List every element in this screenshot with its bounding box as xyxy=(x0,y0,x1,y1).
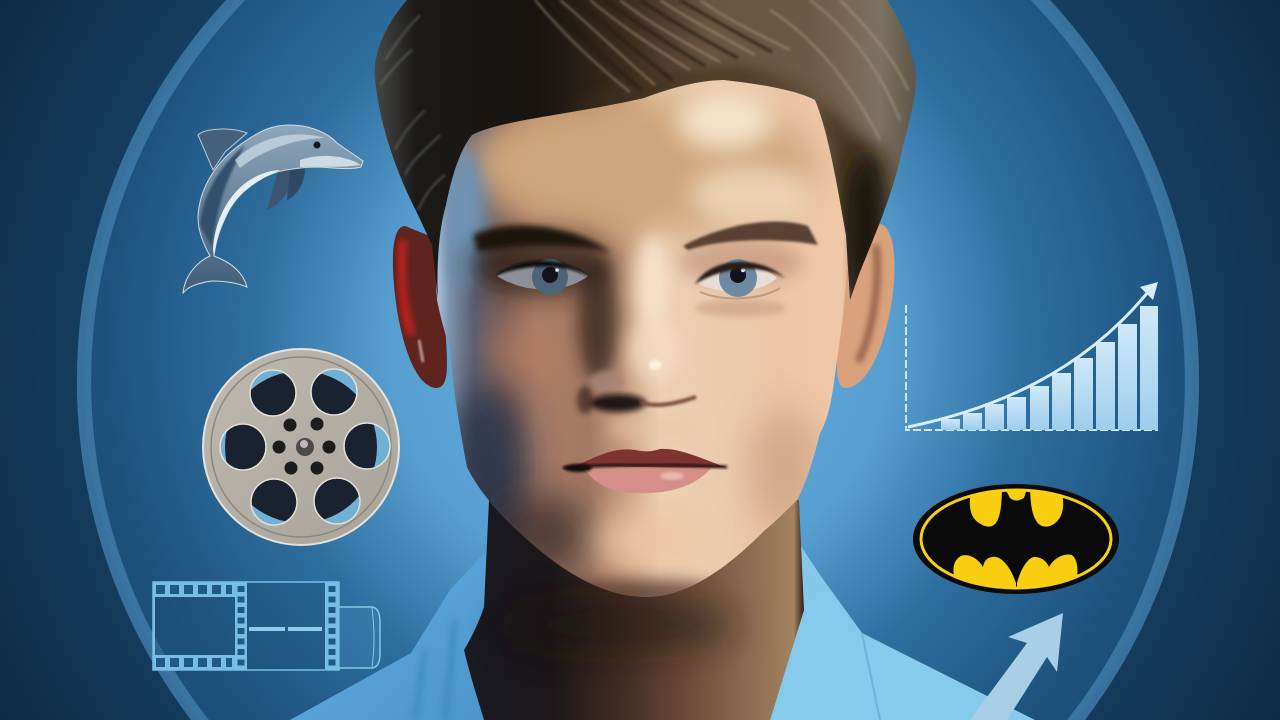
neck xyxy=(464,500,804,720)
hair: hairline shadow xyxy=(592,60,892,280)
eye: right xyxy=(695,259,785,298)
icon: dolphin xyxy=(183,125,363,293)
ear: right xyxy=(837,224,895,388)
icon: bat emblem xyxy=(913,484,1119,595)
face xyxy=(436,70,847,603)
nose xyxy=(577,318,696,414)
eyebrow: right xyxy=(683,222,818,250)
eye: left xyxy=(495,259,590,295)
lips xyxy=(563,449,727,493)
neck shadow xyxy=(500,599,740,651)
shirt: right side xyxy=(770,543,1035,720)
hair: lower right shade xyxy=(842,150,890,320)
icon: film reel xyxy=(203,349,399,545)
arrow xyxy=(970,613,1063,720)
ear: left xyxy=(393,226,447,388)
eyebrow: left xyxy=(473,226,610,252)
reel holes xyxy=(220,370,390,524)
hair: strands xyxy=(535,0,908,140)
shirt: left side xyxy=(290,548,489,720)
icon: growth bar chart xyxy=(906,282,1158,430)
shirt xyxy=(290,543,1035,720)
icon: film strip xyxy=(153,582,380,670)
hair xyxy=(375,0,916,320)
